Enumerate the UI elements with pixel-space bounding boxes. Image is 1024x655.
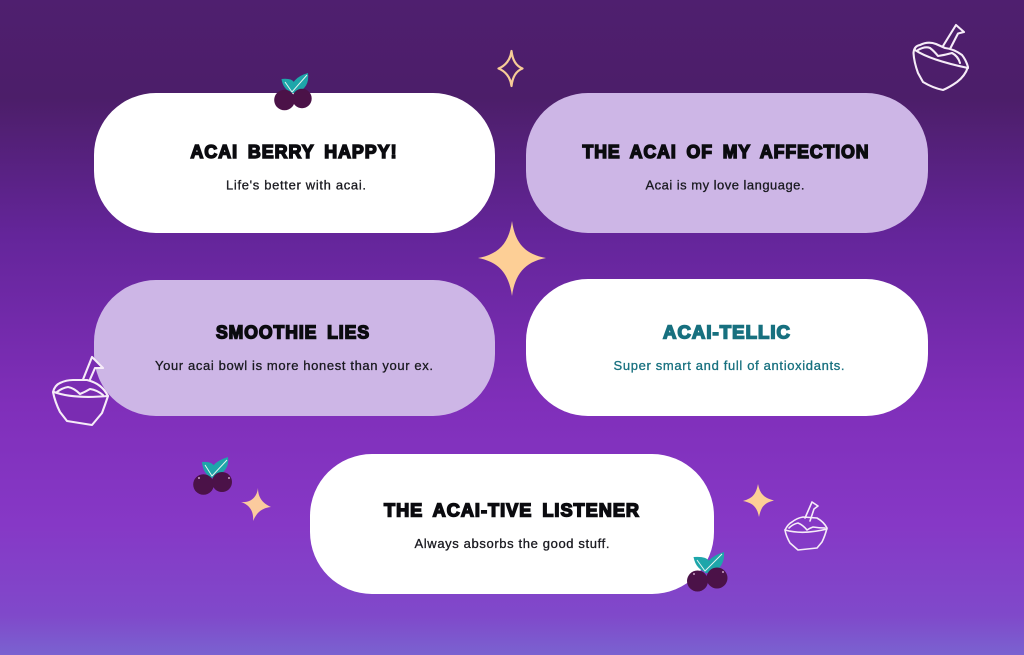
card: Acai-Tellic <box>526 279 928 416</box>
icon: small sparkle left <box>241 488 271 521</box>
icon: bowl left <box>53 357 108 425</box>
icon: bowl bottom right <box>785 502 827 550</box>
heading: The Acai of My Affection: THE ACAI OF MY AFFECTION <box>582 142 870 162</box>
heading: Acai-Tellic: ACAI-TELLIC <box>663 322 791 342</box>
text: Acai-Tellic description: Super smart and full of antioxidants. <box>614 358 844 373</box>
icon: berries lower left <box>193 457 232 495</box>
icon: berries on first card <box>274 73 312 110</box>
text: Smoothie Lies description: Your acai bowl is more honest than your ex. <box>155 358 433 373</box>
heading: The Acai-Tive Listener: THE ACAI-TIVE LISTENER <box>384 500 640 520</box>
heading: Acai Berry Happy: ACAI BERRY HAPPY! <box>190 142 398 162</box>
text: Acai Berry Happy description: Life's better with acai. <box>226 178 366 192</box>
heading: Smoothie Lies: SMOOTHIE LIES <box>216 322 370 342</box>
icon: large sparkle <box>478 221 546 296</box>
card: Acai Berry Happy <box>94 93 495 233</box>
card: Smoothie Lies <box>94 280 495 416</box>
card: The Acai-Tive Listener <box>310 454 714 594</box>
icon: top outlined sparkle <box>498 51 522 86</box>
text: The Acai of My Affection description: Acai is my love language. <box>646 178 804 192</box>
icon: berries on last card <box>687 552 728 592</box>
card: The Acai of My Affection <box>526 93 928 233</box>
icon: small sparkle right <box>743 484 774 517</box>
icon: bowl top right <box>914 25 968 90</box>
text: The Acai-Tive Listener description: Always absorbs the good stuff. <box>414 536 610 551</box>
